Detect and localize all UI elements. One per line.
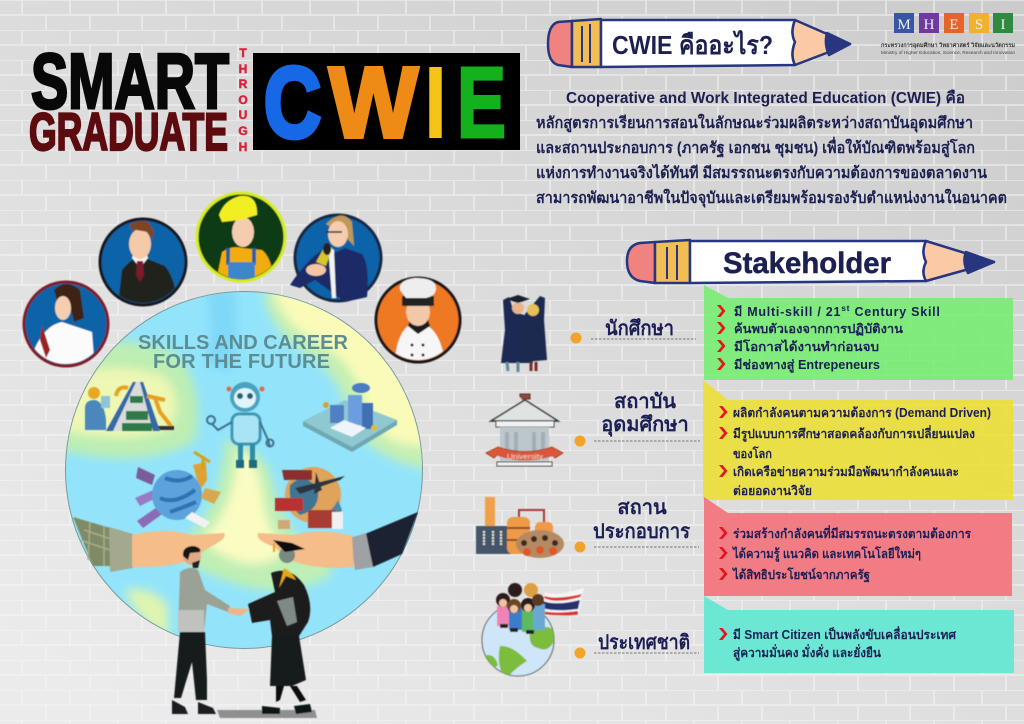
heading pencil: Stakeholder: Stakeholder bbox=[723, 247, 891, 280]
land masses bbox=[60, 288, 430, 640]
graduate bbox=[248, 540, 312, 714]
text block: CWIE definition: Cooperative and Work Integrated Education (CWIE) คือ bbox=[566, 89, 965, 107]
text block: CWIE definition: หลักสูตรการเรียนการสอนในลักษณะร่วมผลิตระหว่างสถาบันอุดมศึกษา bbox=[536, 113, 973, 134]
logo: MHESI: S bbox=[975, 17, 983, 33]
avatar: woman reporter bbox=[290, 215, 381, 302]
bullet list: employer bbox=[719, 525, 971, 583]
label: สถานประกอบการ bbox=[574, 497, 699, 552]
icon: factory robots bbox=[85, 382, 174, 431]
icon: factory and workers bbox=[476, 497, 564, 558]
heading: CWIE block: I bbox=[425, 47, 446, 159]
label: นักศึกษา bbox=[570, 318, 696, 344]
heading: skills and career: SKILLS AND CAREER bbox=[138, 332, 349, 354]
heading: CWIE block bbox=[253, 47, 520, 159]
bullet list: university bbox=[719, 406, 991, 498]
heading: skills and career: FOR THE FUTURE bbox=[153, 351, 330, 373]
panel: สถานประกอบการ benefits bbox=[704, 497, 1012, 596]
heading: THROUGH vertical: R bbox=[239, 77, 248, 91]
label: นักศึกษา: นักศึกษา bbox=[605, 318, 674, 340]
logo: MHESI: M bbox=[897, 17, 911, 33]
avatar: woman with folder bbox=[24, 282, 108, 372]
label: สถานประกอบการ: ประกอบการ bbox=[593, 521, 690, 543]
avatar: engineer bbox=[197, 193, 285, 282]
label: สถาบันอุดมศึกษา bbox=[574, 391, 700, 446]
bullet list: student: st bbox=[841, 303, 850, 313]
illustration: left hand bbox=[73, 517, 225, 572]
heading: CWIE block: W bbox=[329, 47, 419, 159]
heading: GRADUATE: GRADUATE bbox=[29, 103, 228, 162]
heading: THROUGH vertical bbox=[238, 46, 248, 154]
icon: logistics globe right bbox=[275, 467, 345, 529]
panel: นักศึกษา benefits bbox=[704, 285, 1013, 380]
icon: robot bbox=[207, 382, 274, 468]
man bbox=[172, 546, 230, 714]
bullet list: student: Century Skill bbox=[850, 305, 941, 319]
label: ประเทศชาติ: ประเทศชาติ bbox=[598, 632, 690, 654]
heading: THROUGH vertical: U bbox=[239, 108, 247, 122]
bullet list: university: ต่อยอดงานวิจัย bbox=[733, 484, 812, 498]
bullet list: student: มีโอกาสได้งานทำก่อนจบ bbox=[734, 339, 879, 354]
icon: logistics globe left bbox=[135, 452, 221, 528]
logo: MHESI: I bbox=[1000, 17, 1006, 33]
illustration: right hand bbox=[258, 512, 418, 570]
panel: สถาบันอุดมศึกษา benefits bbox=[703, 380, 1013, 500]
label: ประเทศชาติ bbox=[574, 632, 699, 658]
icon: university building bbox=[486, 394, 563, 466]
bullet list: employer: ร่วมสร้างกำลังคนที่มีสมรรถนะตรงตามต้องการ bbox=[733, 525, 971, 541]
heading pencil: Stakeholder bbox=[627, 240, 994, 283]
panel: ประเทศชาติ benefits bbox=[704, 596, 1014, 673]
bullet list: employer: ได้ความรู้ แนวคิด และเทคโนโลยีใหม่ๆ bbox=[731, 546, 921, 562]
icon: university building: University bbox=[507, 454, 544, 461]
heading: CWIE block: E bbox=[457, 47, 506, 159]
label: สถาบันอุดมศึกษา: อุดมศึกษา bbox=[601, 414, 689, 437]
illustration: handshake people bbox=[172, 540, 317, 718]
bullet list: university: ผลิตกำลังคนตามความต้องการ (Demand Driven) bbox=[733, 406, 991, 420]
bullet list: nation: มี Smart Citizen เป็นพลังขับเคลื่อนประเทศ bbox=[733, 626, 957, 642]
logo: MHESI bbox=[881, 13, 1016, 55]
heading: SMART: SMART bbox=[31, 37, 229, 125]
bullet list: nation bbox=[719, 626, 957, 661]
icon: smart city bbox=[303, 383, 397, 452]
heading: THROUGH vertical: H bbox=[239, 62, 247, 76]
bullet list: employer: ได้สิทธิประโยชน์จากภาครัฐ bbox=[731, 567, 870, 583]
bullet list: university: ของโลก bbox=[733, 446, 772, 461]
heading: THROUGH vertical: H bbox=[239, 140, 247, 154]
bullet list: student bbox=[717, 303, 941, 373]
bullet list: student: ค้นพบตัวเองจากการปฏิบัติงาน bbox=[734, 322, 903, 337]
bullet list: nation: สู่ความมั่นคง มั่งคั่ง และยั่งยืน bbox=[733, 644, 881, 661]
heading: THROUGH vertical: T bbox=[239, 46, 247, 60]
logo: MHESI: Ministry of Higher Education, Science, Research and Innovation bbox=[881, 50, 1016, 55]
icon: graduates bbox=[501, 295, 547, 372]
text block: CWIE definition: แห่งการทำงานจริงได้ทันที มีสมรรถนะตรงกับความต้องการของตลาดงาน bbox=[536, 163, 987, 182]
bullet list: university: มีรูปแบบการศึกษาสอดคล้องกับการเปลี่ยนแปลง bbox=[733, 425, 975, 442]
heading pencil: CWIE คืออะไร? bbox=[548, 19, 850, 67]
text block: CWIE definition: และสถานประกอบการ (ภาครัฐ เอกชน ชุมชน) เพื่อให้บัณฑิตพร้อมสู่โลก bbox=[536, 136, 975, 159]
heading: CWIE block: C bbox=[264, 47, 321, 159]
avatar: chef bbox=[376, 278, 460, 368]
logo: MHESI: H bbox=[924, 17, 935, 33]
text block: CWIE definition bbox=[536, 89, 1007, 208]
bullet list: student: มี Multi-skill / 21 bbox=[734, 305, 841, 319]
label: สถาบันอุดมศึกษา: สถาบัน bbox=[614, 391, 676, 413]
handshake bbox=[228, 608, 250, 616]
icon: children on globe with Thai flag bbox=[482, 583, 584, 684]
label: สถานประกอบการ: สถาน bbox=[617, 497, 667, 519]
logo: MHESI: E bbox=[949, 17, 959, 33]
bullet list: university: เกิดเครือข่ายความร่วมมือพัฒนากำลังคนและ bbox=[733, 465, 959, 479]
heading: THROUGH vertical: O bbox=[238, 93, 248, 107]
illustration: globe with skills and career bbox=[60, 288, 430, 718]
floor shadow bbox=[217, 710, 317, 718]
title: Smart Graduate through CWIE bbox=[29, 37, 520, 162]
logo: MHESI: กระทรวงการอุดมศึกษา วิทยาศาสตร์ วิจัยและนวัตกรรม bbox=[881, 42, 1015, 49]
heading: skills and career bbox=[138, 332, 349, 373]
heading pencil: CWIE คืออะไร?: CWIE คืออะไร? bbox=[612, 29, 773, 60]
avatar: businessman bbox=[100, 219, 186, 305]
heading: THROUGH vertical: G bbox=[238, 124, 248, 138]
bullet list: student: มีช่องทางสู่ Entrepeneurs bbox=[734, 358, 880, 373]
